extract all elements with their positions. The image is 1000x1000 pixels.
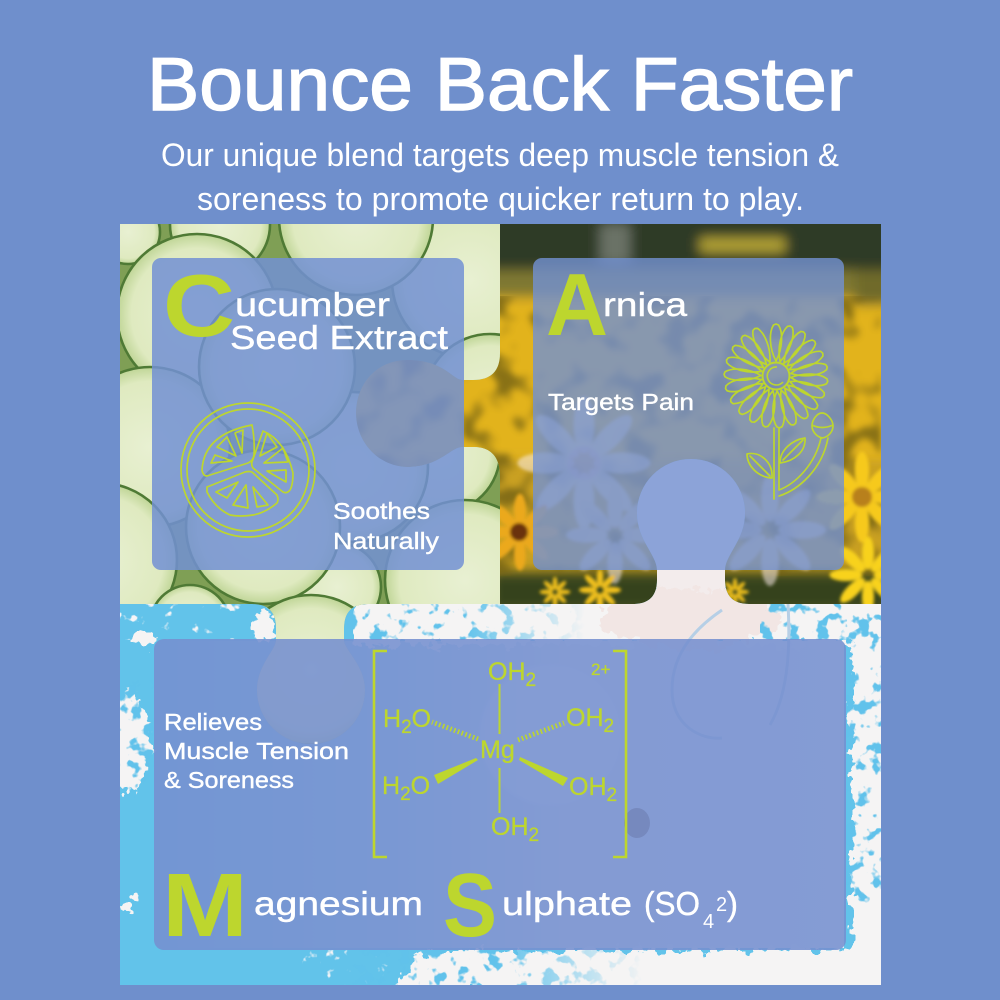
- chart: magnesium hexahydrate structure: 2+: [591, 660, 610, 679]
- heading: magnesium sulphate: 4: [703, 911, 714, 933]
- chart: magnesium hexahydrate structure: 2: [400, 784, 411, 805]
- heading: cucumber seed extract: ucumber: [235, 286, 390, 323]
- heading: magnesium sulphate: ulphate: [502, 885, 632, 922]
- text: relieves muscle tension and soreness: & Soreness: [164, 767, 294, 793]
- chart: magnesium hexahydrate structure: OH: [566, 704, 604, 732]
- heading: magnesium sulphate: M: [162, 856, 248, 956]
- subtitle: Our unique blend targets deep muscle tension &: [161, 137, 839, 173]
- chart: magnesium hexahydrate structure: 2: [401, 717, 412, 738]
- photo: arnica flowers: [356, 224, 881, 604]
- heading: magnesium sulphate: agnesium: [254, 885, 423, 922]
- heading: magnesium sulphate: S: [443, 856, 497, 956]
- subtitle: [161, 137, 839, 217]
- heading: arnica: [546, 255, 688, 354]
- chart: magnesium hexahydrate structure: [374, 651, 626, 857]
- text: soothes naturally: [333, 498, 440, 554]
- chart: magnesium hexahydrate structure: O: [411, 772, 430, 800]
- heading: cucumber seed extract: [163, 256, 448, 356]
- text: targets pain: Targets Pain: [548, 389, 694, 415]
- heading: cucumber seed extract: Seed Extract: [230, 319, 448, 356]
- chart: magnesium hexahydrate structure: OH: [491, 813, 528, 841]
- chart: magnesium hexahydrate structure: Mg: [480, 736, 515, 764]
- text: relieves muscle tension and soreness: [164, 709, 349, 793]
- subtitle: soreness to promote quicker return to play.: [197, 181, 804, 217]
- photo: cucumber slices: [120, 224, 500, 744]
- photo: magnesium salt crystals: [106, 440, 892, 994]
- heading: magnesium sulphate: ): [727, 885, 738, 922]
- chart: magnesium hexahydrate structure: 2: [526, 670, 536, 691]
- heading: magnesium sulphate: 2: [716, 894, 727, 916]
- heading: magnesium sulphate: (SO: [644, 885, 700, 922]
- heading: cucumber seed extract: C: [163, 256, 235, 355]
- text: soothes naturally: Naturally: [333, 528, 440, 554]
- heading: arnica: rnica: [603, 286, 688, 323]
- text: relieves muscle tension and soreness: Muscle Tension: [164, 738, 349, 764]
- heading: arnica: A: [546, 255, 608, 354]
- chart: magnesium hexahydrate structure: OH: [488, 658, 526, 686]
- chart: magnesium hexahydrate structure: H: [382, 772, 400, 800]
- title: Bounce Back Faster: [147, 42, 853, 126]
- chart: magnesium hexahydrate structure: 2: [528, 825, 539, 846]
- chart: magnesium hexahydrate structure: H: [383, 705, 401, 733]
- text: relieves muscle tension and soreness: Relieves: [164, 709, 262, 735]
- panel: cucumber: [152, 258, 464, 570]
- panel: arnica: [533, 258, 844, 570]
- text: soothes naturally: Soothes: [333, 498, 430, 524]
- chart: magnesium hexahydrate structure: OH: [569, 773, 606, 801]
- chart: magnesium hexahydrate structure: 2: [604, 716, 614, 737]
- heading: magnesium sulphate: [162, 856, 738, 956]
- icon: arnica flower: [724, 324, 833, 499]
- icon: cucumber slice: [181, 403, 315, 537]
- chart: magnesium hexahydrate structure: O: [412, 705, 431, 733]
- panel: magnesium sulphate: [154, 639, 846, 950]
- chart: magnesium hexahydrate structure: 2: [606, 785, 617, 806]
